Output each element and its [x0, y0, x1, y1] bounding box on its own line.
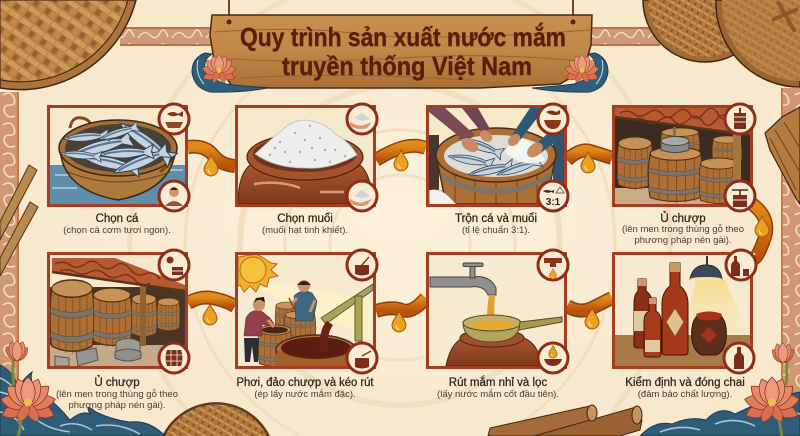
icon: hand with salt bottom: [347, 181, 377, 211]
panel 8: kiem dinh dong chai: [614, 250, 756, 373]
icon: tap drip: [538, 250, 568, 280]
caption: u chuop 2: [56, 376, 178, 411]
bottles: [634, 279, 652, 348]
icon: bottle: [724, 343, 754, 373]
basket top right large: [716, 0, 800, 87]
caption: tron ca va muoi: [455, 213, 537, 236]
icon: fish and bowl: [538, 104, 568, 134]
icon: ratio 3:1: 3:1: [546, 197, 561, 208]
caption: tron ca va muoi: (tỉ lệ chuẩn 3:1).: [462, 225, 530, 236]
icon: barrel press bottom: [725, 181, 755, 211]
caption: u chuop: (lên men trong thùng gỗ theo: [622, 224, 744, 235]
basket: [60, 148, 176, 200]
ribbon 2 to 3: [376, 146, 426, 171]
connector ribbons: [188, 146, 769, 332]
left decorative border: [0, 92, 19, 436]
lotus bottom right: [743, 342, 800, 436]
big tub: [275, 334, 354, 354]
icon: sun and barrel: [159, 250, 189, 280]
bamboo and stream: [321, 284, 373, 324]
tub: [436, 155, 556, 204]
top decorative bands: [120, 27, 660, 46]
title signboard: [192, 0, 608, 92]
caption: chon muoi: (muối hạt tinh khiết).: [262, 225, 348, 236]
person right: [294, 291, 317, 321]
waves bottom left: [0, 365, 165, 436]
caption: chon ca: Chọn cá: [96, 213, 139, 225]
icon: hand with salt top: [347, 104, 377, 134]
caption: u chuop 2: (lên men trong thùng gỗ theo: [56, 389, 178, 400]
caption: kiem dinh: Kiểm định và đóng chai: [625, 377, 745, 389]
caption: phoi dao chuop: (ép lấy nước mắm đặc).: [254, 389, 356, 400]
sun: [238, 254, 278, 292]
icon: fish and boat: [159, 104, 189, 134]
wooden plank right: [765, 107, 800, 204]
icon: ratio 3:1: [538, 181, 568, 211]
salt: [255, 120, 357, 168]
caption: u chuop: [622, 212, 744, 246]
ribbon row 2 left: [188, 298, 235, 325]
caption: chon muoi: [262, 213, 348, 236]
bottom wooden logs: [488, 405, 642, 436]
panel 2: chon muoi: [236, 104, 377, 211]
press: [673, 127, 676, 136]
icon: fisherman: [159, 181, 189, 211]
icon: bowl drop: [538, 343, 568, 373]
caption: phoi dao chuop: Phơi, đảo chượp và kéo rút: [236, 377, 374, 389]
caption: rut mam nhi: [437, 376, 559, 400]
ribbon row 2 middle: [376, 298, 426, 332]
basket top left: [0, 0, 136, 90]
roof: [52, 258, 185, 290]
panel 5: u chuop barrels: [48, 250, 189, 373]
caption: kiem dinh: (đảm bảo chất lượng).: [638, 389, 732, 400]
lamp: [706, 256, 708, 266]
barrels: [274, 302, 295, 326]
lotus bottom left: [0, 340, 57, 436]
caption: u chuop: Ủ chượp: [660, 212, 706, 225]
caption: rut mam nhi: (lấy nước mắm cốt đầu tiên).: [437, 389, 559, 400]
fish mix: [447, 154, 496, 166]
bottom round basket: [162, 402, 270, 436]
caption: rut mam nhi: Rút mắm nhỉ và lọc: [449, 376, 547, 389]
panel 6: phoi dao chuop: [236, 250, 377, 373]
icon: barrel stir top: [347, 250, 377, 280]
wood plank: [210, 15, 592, 88]
caption: u chuop 2: phương pháp nén gài).: [68, 400, 166, 411]
sign lotus left: [192, 53, 268, 92]
title text: Quy trình sản xuất nước mắm: [240, 22, 566, 52]
caption: tron ca va muoi: Trộn cá và muối: [455, 213, 537, 225]
basket top right small: [643, 0, 767, 62]
caption: phoi dao chuop: [236, 377, 374, 400]
caption: kiem dinh: [625, 377, 745, 400]
person left: [244, 310, 274, 336]
panel 1: chon ca: [48, 104, 189, 211]
arms: [429, 108, 475, 142]
pot: [446, 338, 540, 366]
caption: u chuop: phương pháp nén gài).: [634, 235, 732, 246]
jar: [692, 315, 726, 355]
icon: barrel press top: [725, 104, 755, 134]
sign lotus right: [532, 53, 608, 92]
faint bronze drum pattern: [130, 0, 670, 436]
caption: u chuop 2: Ủ chượp: [94, 376, 140, 389]
icon: barrel: [159, 343, 189, 373]
ribbon row 2 right: [567, 298, 612, 329]
ribbon 1 to 2: [188, 147, 235, 176]
panel 3: tron ca va muoi: [428, 104, 568, 211]
jar: [238, 165, 372, 204]
ribbon 3 to 4: [567, 150, 612, 173]
tap: [430, 276, 496, 295]
title signboard: truyền thống Việt Nam: [282, 51, 532, 81]
stones: [116, 338, 140, 352]
panel 4: u chuop press: [614, 104, 755, 211]
stream and pan: [487, 295, 495, 315]
caption: chon ca: [63, 213, 171, 236]
roof: [615, 108, 750, 134]
icon: barrel pour bottom: [347, 343, 377, 373]
caption: chon muoi: Chọn muối: [277, 213, 333, 225]
bamboo sticks left: [0, 165, 38, 276]
hanging ropes: [229, 0, 573, 22]
icon: bottle and glass: [726, 250, 756, 280]
caption: chon ca: (chọn cá cơm tươi ngon).: [63, 225, 171, 236]
waves bottom right: [640, 392, 800, 436]
right decorative border: [781, 88, 800, 436]
ribbon 4 to 5 bend: [752, 204, 769, 259]
panel 7: rut mam nhi: [428, 250, 568, 373]
